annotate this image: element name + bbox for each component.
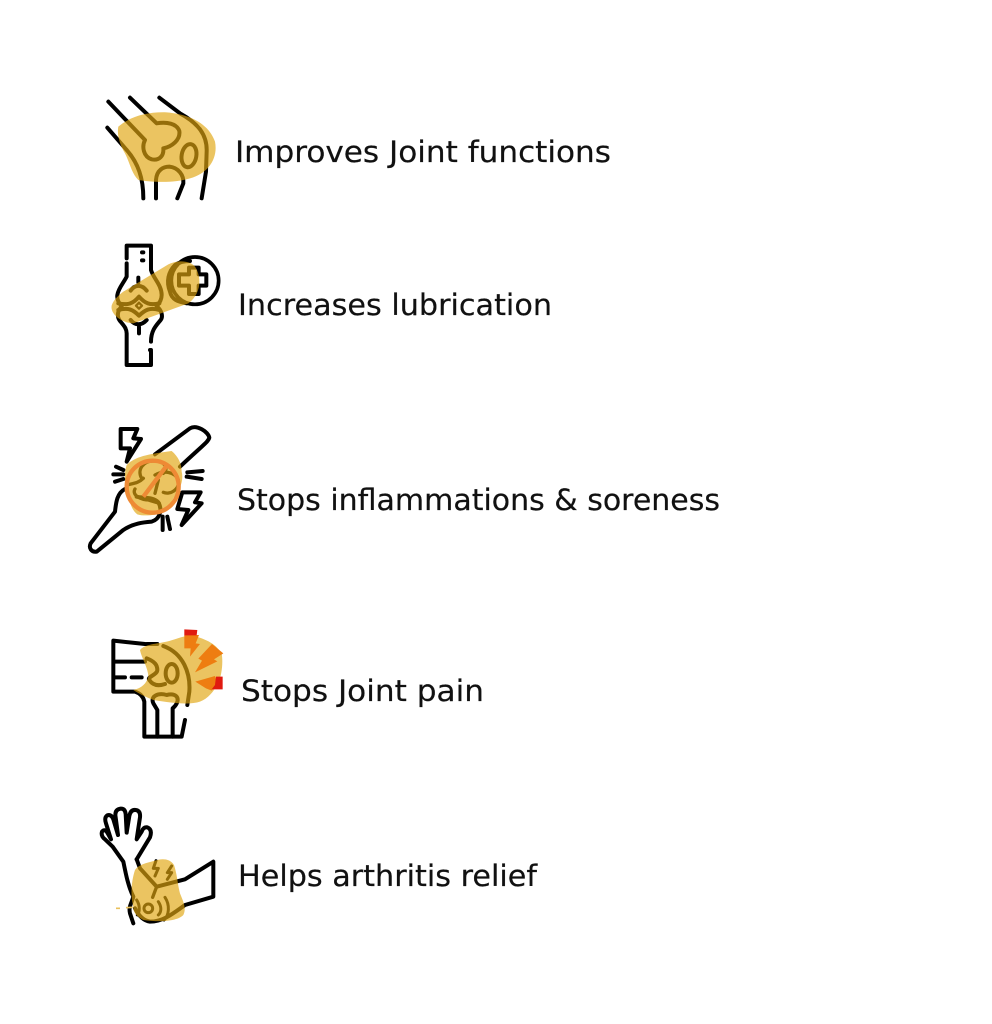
row: helps arthritis relief [102, 809, 538, 923]
label: Stops Joint pain [241, 674, 484, 708]
icon: inflamed joint with prohibition sign [90, 427, 209, 552]
icon: joint with medical cross [112, 246, 219, 365]
label: Helps arthritis relief [238, 859, 538, 893]
label: Increases lubrication [238, 288, 552, 322]
row: stops inflammations and soreness [90, 427, 720, 552]
row: improves joint functions [107, 98, 611, 198]
icon: raised arm with sore elbow [102, 809, 213, 923]
row: stops joint pain [113, 629, 484, 737]
label: Improves Joint functions [235, 135, 611, 169]
icon: knee joint [107, 98, 216, 198]
icon: knee with pain bolts [113, 629, 223, 737]
icon detail: pain bolts [184, 629, 223, 691]
label: Stops inflammations & soreness [237, 483, 720, 517]
row: increases lubrication [112, 246, 552, 365]
